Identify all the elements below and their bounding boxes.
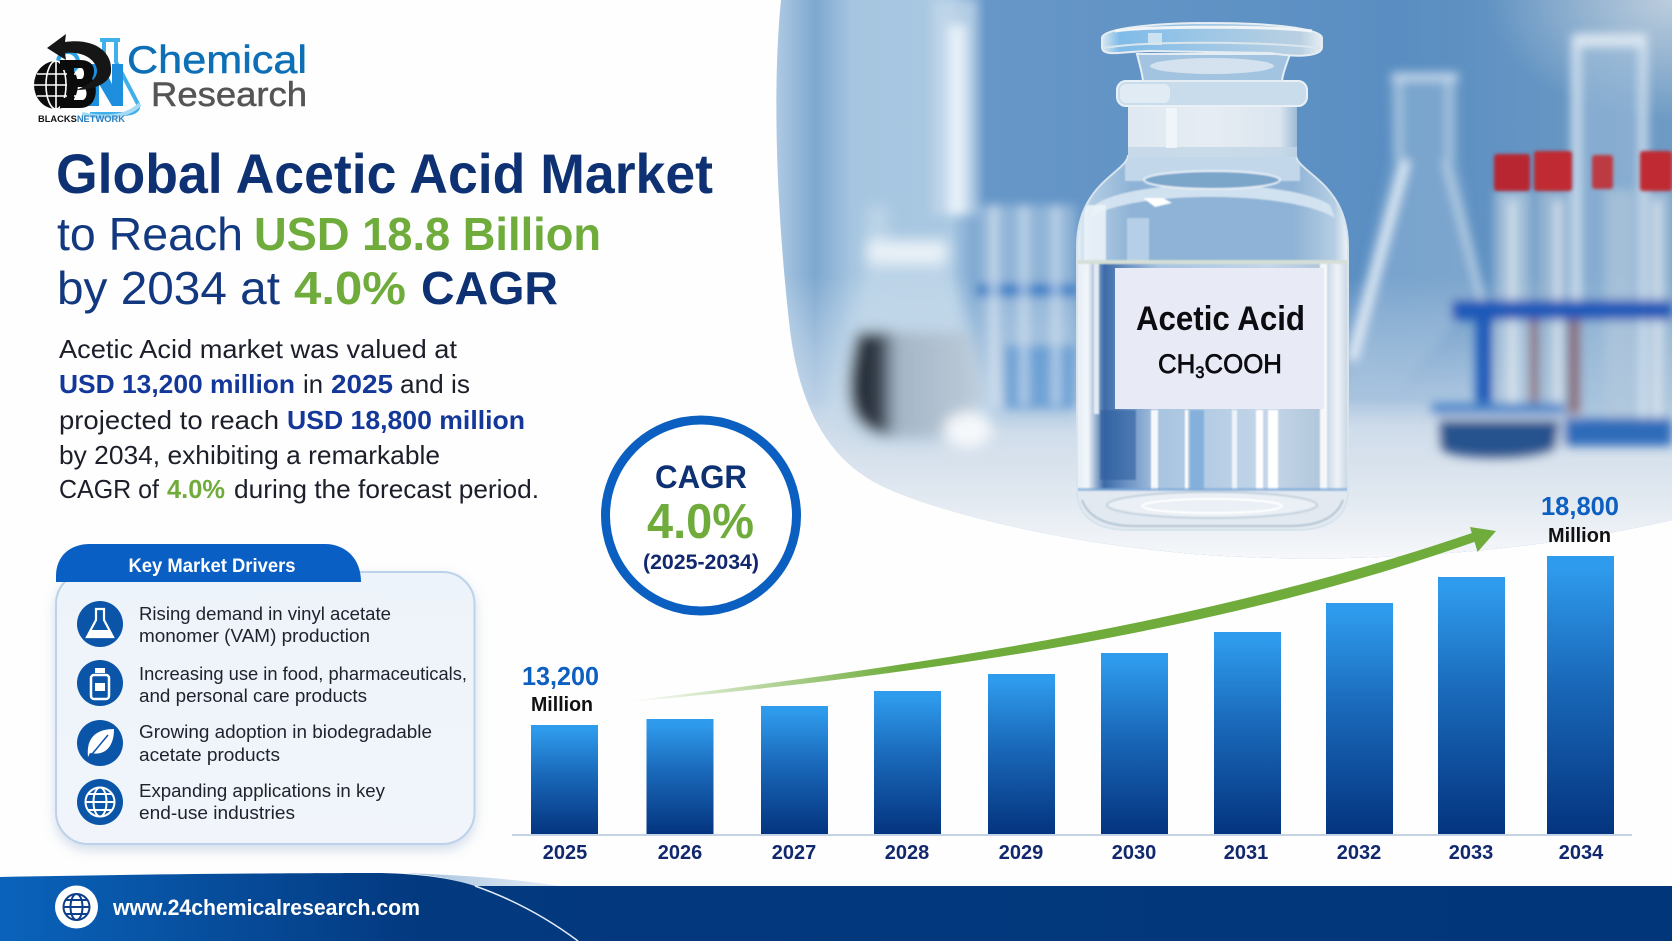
logo: Research: Research xyxy=(151,76,307,114)
driver 2 xyxy=(77,660,467,706)
panel heading: Key Market Drivers xyxy=(128,555,296,577)
start value label: 13,200 xyxy=(522,661,599,691)
year axis labels: 2025 xyxy=(543,842,587,864)
label: formula: 3 xyxy=(1195,363,1204,382)
title line 2 xyxy=(57,208,601,260)
CAGR badge xyxy=(606,420,796,611)
bar 2033 xyxy=(1438,577,1505,834)
glass bottle xyxy=(1077,23,1348,532)
panel header tab xyxy=(56,544,361,582)
driver 4: Expanding applications in key xyxy=(139,780,386,801)
logo small wordmark: BLACKSNETWORK xyxy=(38,114,126,124)
title line 3: 4.0% xyxy=(294,262,406,314)
driver 2: Increasing use in food, pharmaceuticals, xyxy=(139,663,467,684)
year axis labels: 2026 xyxy=(658,842,702,864)
year axis labels: 2033 xyxy=(1449,842,1493,864)
driver 1: monomer (VAM) production xyxy=(139,625,370,646)
icon: flask xyxy=(77,601,123,647)
intro paragraph: USD 13,200 million xyxy=(59,369,295,399)
logo icon: globe xyxy=(34,61,78,109)
CAGR period: (2025-2034) xyxy=(643,551,759,574)
driver 4: end-use industries xyxy=(139,802,295,823)
intro paragraph xyxy=(59,334,539,504)
intro paragraph: USD 18,800 million xyxy=(287,405,525,435)
title line 2: to Reach xyxy=(57,208,243,260)
footer website: www.24chemicalresearch.com xyxy=(112,895,420,920)
bar chart xyxy=(512,491,1632,864)
logo arrow xyxy=(47,34,111,90)
end value label: Million xyxy=(1548,524,1611,547)
stopper disk xyxy=(1102,23,1322,56)
intro paragraph: 2025 xyxy=(331,369,393,399)
title line 3: CAGR xyxy=(421,262,558,314)
label: formula: CH xyxy=(1158,349,1197,379)
end value label: 18,800 xyxy=(1541,491,1619,521)
CAGR label: CAGR xyxy=(655,459,747,495)
label: name: Acetic Acid xyxy=(1136,300,1305,338)
driver 3: acetate products xyxy=(139,744,280,765)
blurred left flask xyxy=(833,205,993,448)
driver 4 xyxy=(77,779,386,825)
intro paragraph: during the forecast period. xyxy=(234,474,539,504)
logo letter B xyxy=(60,60,96,108)
intro paragraph: 4.0% xyxy=(167,474,225,504)
logo: Chemical: Chemical xyxy=(127,39,307,82)
collar xyxy=(1117,81,1307,106)
icon: bottle xyxy=(77,660,123,706)
intro paragraph: Acetic Acid market was valued at xyxy=(59,334,458,364)
title xyxy=(56,142,713,314)
bar 2034 xyxy=(1547,556,1614,834)
intro paragraph: CAGR of xyxy=(59,474,160,504)
driver 3 xyxy=(77,720,432,766)
driver 1: Rising demand in vinyl acetate xyxy=(139,603,391,624)
table surface xyxy=(814,407,1672,558)
bar 2031 xyxy=(1214,632,1281,834)
title line 3: by 2034 at xyxy=(57,262,280,314)
logo xyxy=(34,34,307,124)
start value label xyxy=(522,661,599,716)
driver 3: Growing adoption in biodegradable xyxy=(139,721,432,742)
hero photo: laboratory bottle xyxy=(770,0,1672,570)
year axis labels: 2028 xyxy=(885,842,929,864)
bar 2028 xyxy=(874,691,941,834)
frosted neck xyxy=(1128,105,1297,157)
year axis labels: 2031 xyxy=(1224,842,1268,864)
year axis labels: 2029 xyxy=(999,842,1043,864)
footer globe icon xyxy=(55,886,98,928)
bottle body glass xyxy=(1078,164,1347,262)
year axis labels: 2034 xyxy=(1559,842,1604,864)
label: formula: COOH xyxy=(1204,349,1282,379)
title line 3 xyxy=(57,262,558,314)
year axis labels: 2032 xyxy=(1337,842,1381,864)
end value label xyxy=(1541,491,1619,547)
bar 2025 xyxy=(531,725,598,834)
test tube red caps xyxy=(1494,151,1672,191)
logo icon: flask xyxy=(58,40,140,117)
start value label: Million xyxy=(531,693,593,716)
year axis labels: 2030 xyxy=(1112,842,1156,864)
intro paragraph: in xyxy=(303,369,323,399)
year axis labels xyxy=(543,842,1604,864)
icon: leaf xyxy=(77,720,123,766)
icon: globe xyxy=(77,779,123,825)
title line 1: Global Acetic Acid Market xyxy=(56,142,713,205)
bar 2027 xyxy=(761,706,828,834)
bar 2032 xyxy=(1326,603,1393,834)
blurred background glassware xyxy=(932,0,1672,460)
stopper neck xyxy=(1137,54,1290,81)
year axis labels: 2027 xyxy=(772,842,816,864)
CAGR value: 4.0% xyxy=(647,495,754,549)
bar 2030 xyxy=(1101,653,1168,834)
panel: key market drivers xyxy=(56,544,474,844)
intro paragraph: projected to reach xyxy=(59,405,279,435)
footer band xyxy=(0,873,1672,941)
intro paragraph: and is xyxy=(400,369,470,399)
bottle label xyxy=(1115,268,1324,409)
growth arrow xyxy=(629,527,1496,702)
bar 2029 xyxy=(988,674,1055,834)
title line 2: USD 18.8 Billion xyxy=(254,208,601,260)
intro paragraph: by 2034, exhibiting a remarkable xyxy=(59,440,440,470)
driver 2: and personal care products xyxy=(139,685,367,706)
bar 2026 xyxy=(646,719,714,834)
driver 1 xyxy=(77,601,391,647)
